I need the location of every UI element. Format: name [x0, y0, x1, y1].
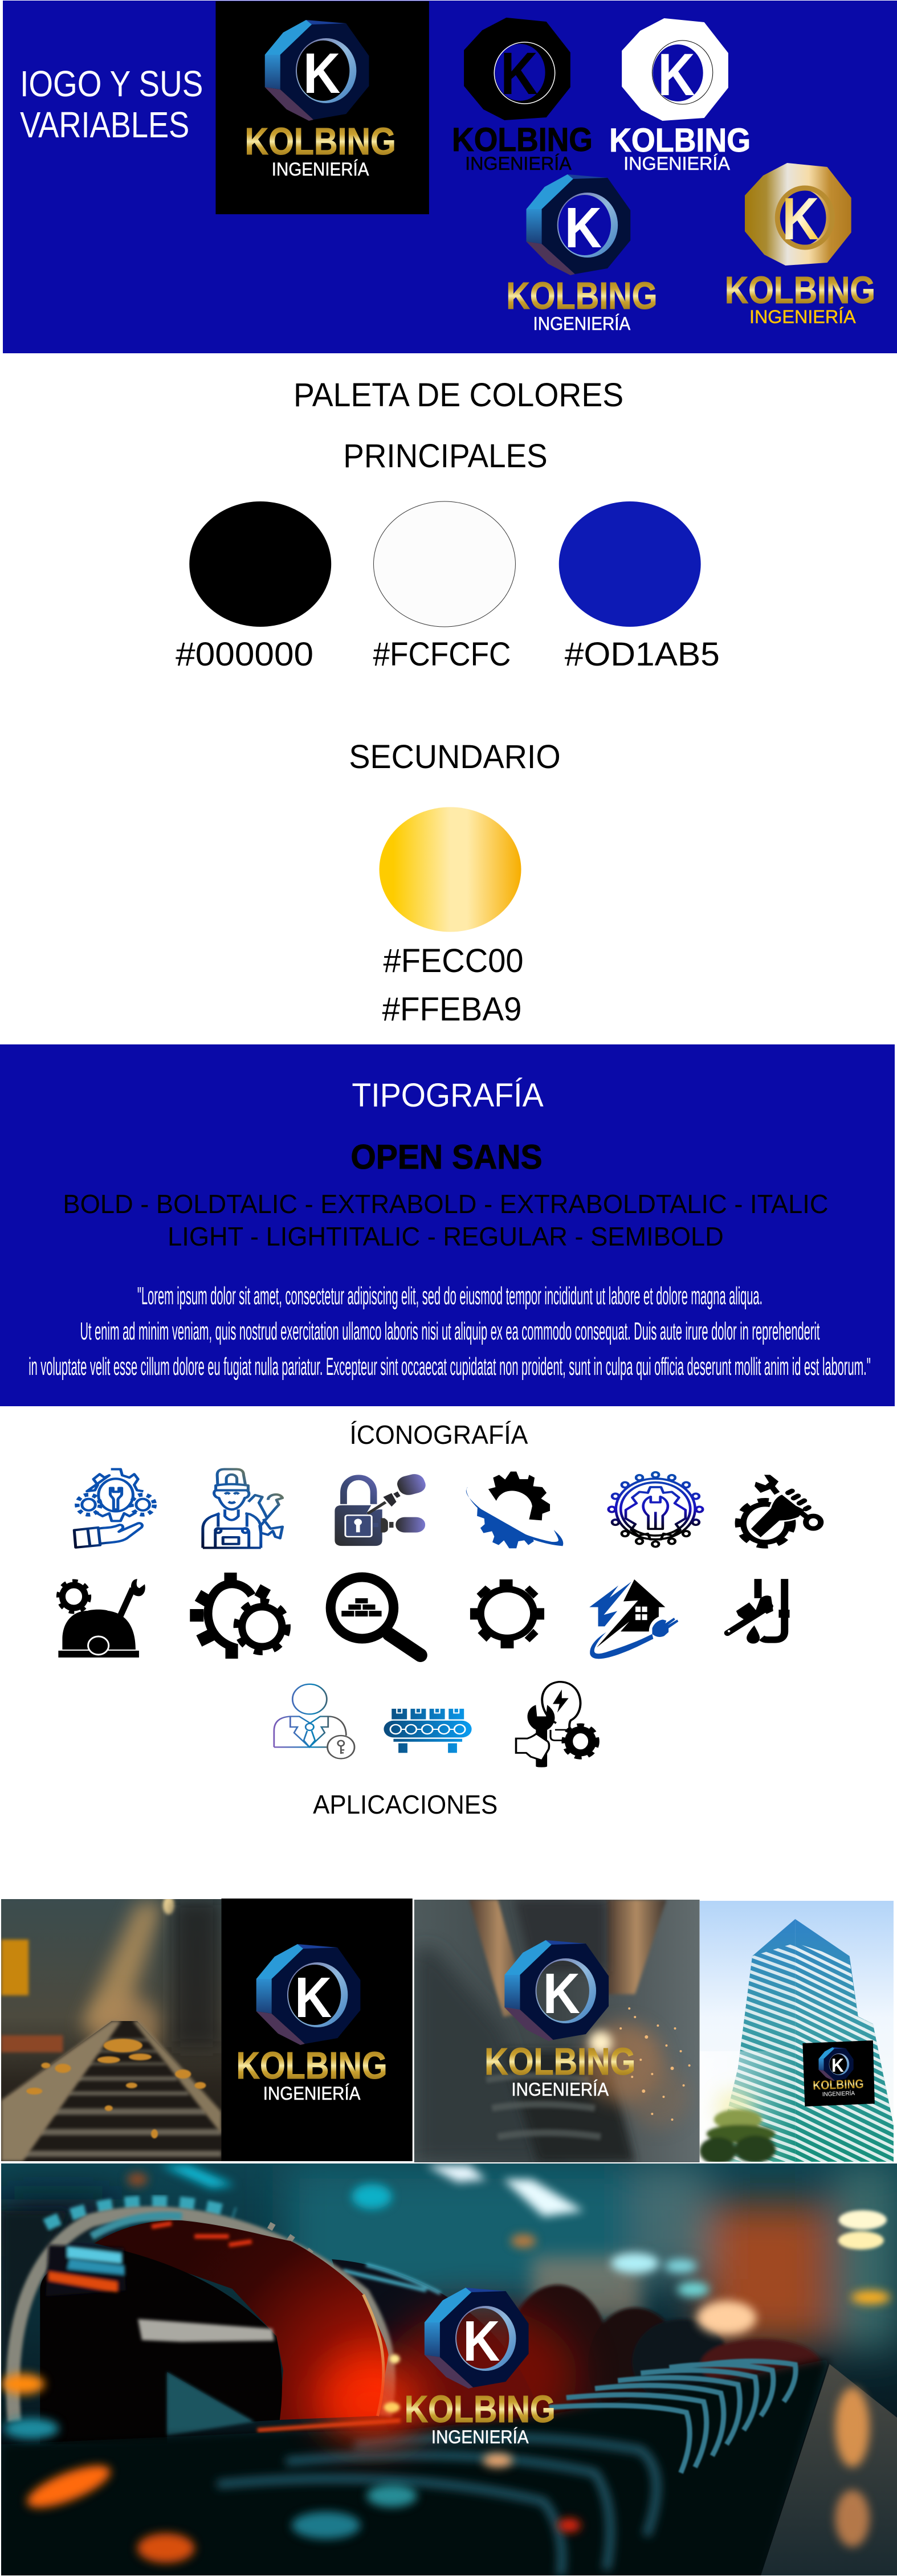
panel: typography	[0, 1044, 895, 1406]
sign with small logo	[802, 2040, 875, 2106]
logo on panel: K	[295, 1966, 332, 2030]
dark left backdrop	[1, 2207, 54, 2366]
ribbed screw	[549, 2361, 796, 2473]
logo black variant: KOLBING	[452, 121, 593, 158]
logo white variant: INGENIERÍA	[623, 153, 731, 174]
logo on black panel: INGENIERÍA	[272, 159, 369, 179]
logo over machinery: INGENIERÍA	[511, 2079, 609, 2100]
font weights list	[63, 1189, 829, 1251]
sign with small logo: K	[831, 2055, 844, 2076]
icon: magnifier with bricks	[331, 1577, 421, 1655]
icon set	[58, 1469, 821, 1767]
logo white variant: K	[658, 42, 695, 108]
lights and bokeh	[1, 2165, 890, 2563]
swatch: blue: #OD1AB5	[565, 636, 720, 673]
ring band	[13, 2213, 389, 2422]
swatch: black	[176, 501, 331, 673]
photo: conveyor rail with logo panel	[1, 1896, 413, 2161]
heading: logo y sus variables	[20, 63, 203, 145]
sample paragraph	[28, 1282, 871, 1381]
heading: paleta de colores: PALETA DE COLORES	[293, 377, 623, 414]
icon: executive with key	[274, 1684, 354, 1758]
logo on panel	[237, 1944, 388, 2104]
sign with small logo: KOLBING	[813, 2076, 864, 2093]
heading: aplicaciones: APLICACIONES	[313, 1790, 498, 1819]
heading: secundario: SECUNDARIO	[349, 738, 561, 775]
near cylinder	[332, 2259, 539, 2415]
metallic block left of ring	[46, 2245, 126, 2296]
logo full colour variant	[506, 174, 657, 334]
font name: OPEN SANS	[350, 1138, 543, 1176]
panel: colour palette	[176, 377, 720, 1028]
icon: gear	[470, 1579, 544, 1648]
logo black variant: K	[500, 40, 538, 107]
swatch: gold gradient: #FECC00	[384, 942, 524, 979]
glow	[320, 2362, 423, 2442]
logo on black panel	[215, 1, 429, 214]
welding sparks	[614, 2007, 691, 2121]
icon: house with lightning and plug	[589, 1579, 678, 1659]
icon: lock with plug	[335, 1472, 428, 1546]
icon: two gears	[190, 1573, 287, 1659]
panel: logo and variants	[3, 1, 897, 353]
logo on panel: INGENIERÍA	[263, 2083, 361, 2104]
teeth on ring	[46, 2202, 235, 2225]
logo full colour variant: KOLBING	[506, 275, 657, 317]
black interior	[40, 2251, 282, 2444]
sign with small logo: INGENIERÍA	[822, 2089, 855, 2098]
lower dark body	[2, 2356, 831, 2507]
right rail	[761, 2364, 897, 2575]
logo gold variant: KOLBING	[725, 269, 875, 312]
icon: gear lightbulb badge	[609, 1472, 703, 1547]
logo gold variant: INGENIERÍA	[749, 307, 856, 327]
swatch: white: #FCFCFC	[373, 636, 511, 673]
font weights list: BOLD - BOLDTALIC - EXTRABOLD - EXTRABOLDTALIC - ITALIC	[63, 1189, 829, 1219]
icon: fist with wrench and gear	[739, 1475, 821, 1546]
logo over machinery: K	[543, 1962, 580, 2026]
swatch: blue	[559, 501, 720, 673]
black logo panel	[221, 1899, 413, 2161]
heading: principales: PRINCIPALES	[343, 438, 548, 475]
swatch: gold gradient: #FFEBA9	[382, 991, 521, 1028]
logo on panel: KOLBING	[237, 2044, 388, 2087]
font weights list: LIGHT - LIGHTITALIC - REGULAR - SEMIBOLD	[168, 1222, 724, 1251]
logo on black panel: K	[303, 42, 340, 105]
heading: tipografía: TIPOGRAFÍA	[352, 1077, 544, 1114]
icon: bulb, wrench and gear in hand	[516, 1682, 597, 1767]
logo over machinery: KOLBING	[484, 2040, 635, 2083]
icon: pipe wrench with drop	[727, 1579, 790, 1644]
logo over photo: INGENIERÍA	[431, 2427, 529, 2447]
icon: conveyor belt	[384, 1709, 472, 1753]
swatch: white	[373, 501, 515, 673]
heading: logo y sus variables: VARIABLES	[20, 104, 189, 145]
logo white variant: KOLBING	[609, 122, 751, 159]
logo over machinery	[484, 1940, 635, 2100]
cylinders	[506, 2285, 821, 2427]
logo white variant	[609, 18, 751, 174]
logo gold variant: K	[782, 186, 819, 252]
logo full colour variant: K	[565, 196, 602, 260]
icon: helmet with gear and wrench	[58, 1580, 144, 1658]
logo over photo: KOLBING	[405, 2388, 556, 2431]
logo over photo	[405, 2288, 556, 2447]
swatch: gold gradient	[380, 807, 524, 1028]
logo black variant	[452, 18, 593, 174]
icon: gear with blue swoosh	[466, 1472, 563, 1548]
logo over photo: K	[463, 2309, 500, 2373]
icon: worker with wrenches	[203, 1469, 283, 1548]
logo on black panel: KOLBING	[245, 120, 396, 163]
swatch: black: #000000	[176, 636, 313, 673]
ring interior	[95, 2220, 389, 2420]
logo gold variant	[725, 163, 875, 327]
photo: tower with sign	[700, 1901, 894, 2165]
photo: glowing roller with logo	[1, 2163, 897, 2575]
heading: iconografía: ÍCONOGRAFÍA	[349, 1420, 528, 1450]
background tones	[1, 2165, 897, 2348]
logo full colour variant: INGENIERÍA	[533, 313, 631, 334]
logo black variant: INGENIERÍA	[465, 153, 572, 174]
photo: machinery with logo	[414, 1900, 700, 2162]
heading: logo y sus variables: IOGO Y SUS	[20, 63, 203, 104]
icon: hand holding gears	[74, 1469, 154, 1548]
